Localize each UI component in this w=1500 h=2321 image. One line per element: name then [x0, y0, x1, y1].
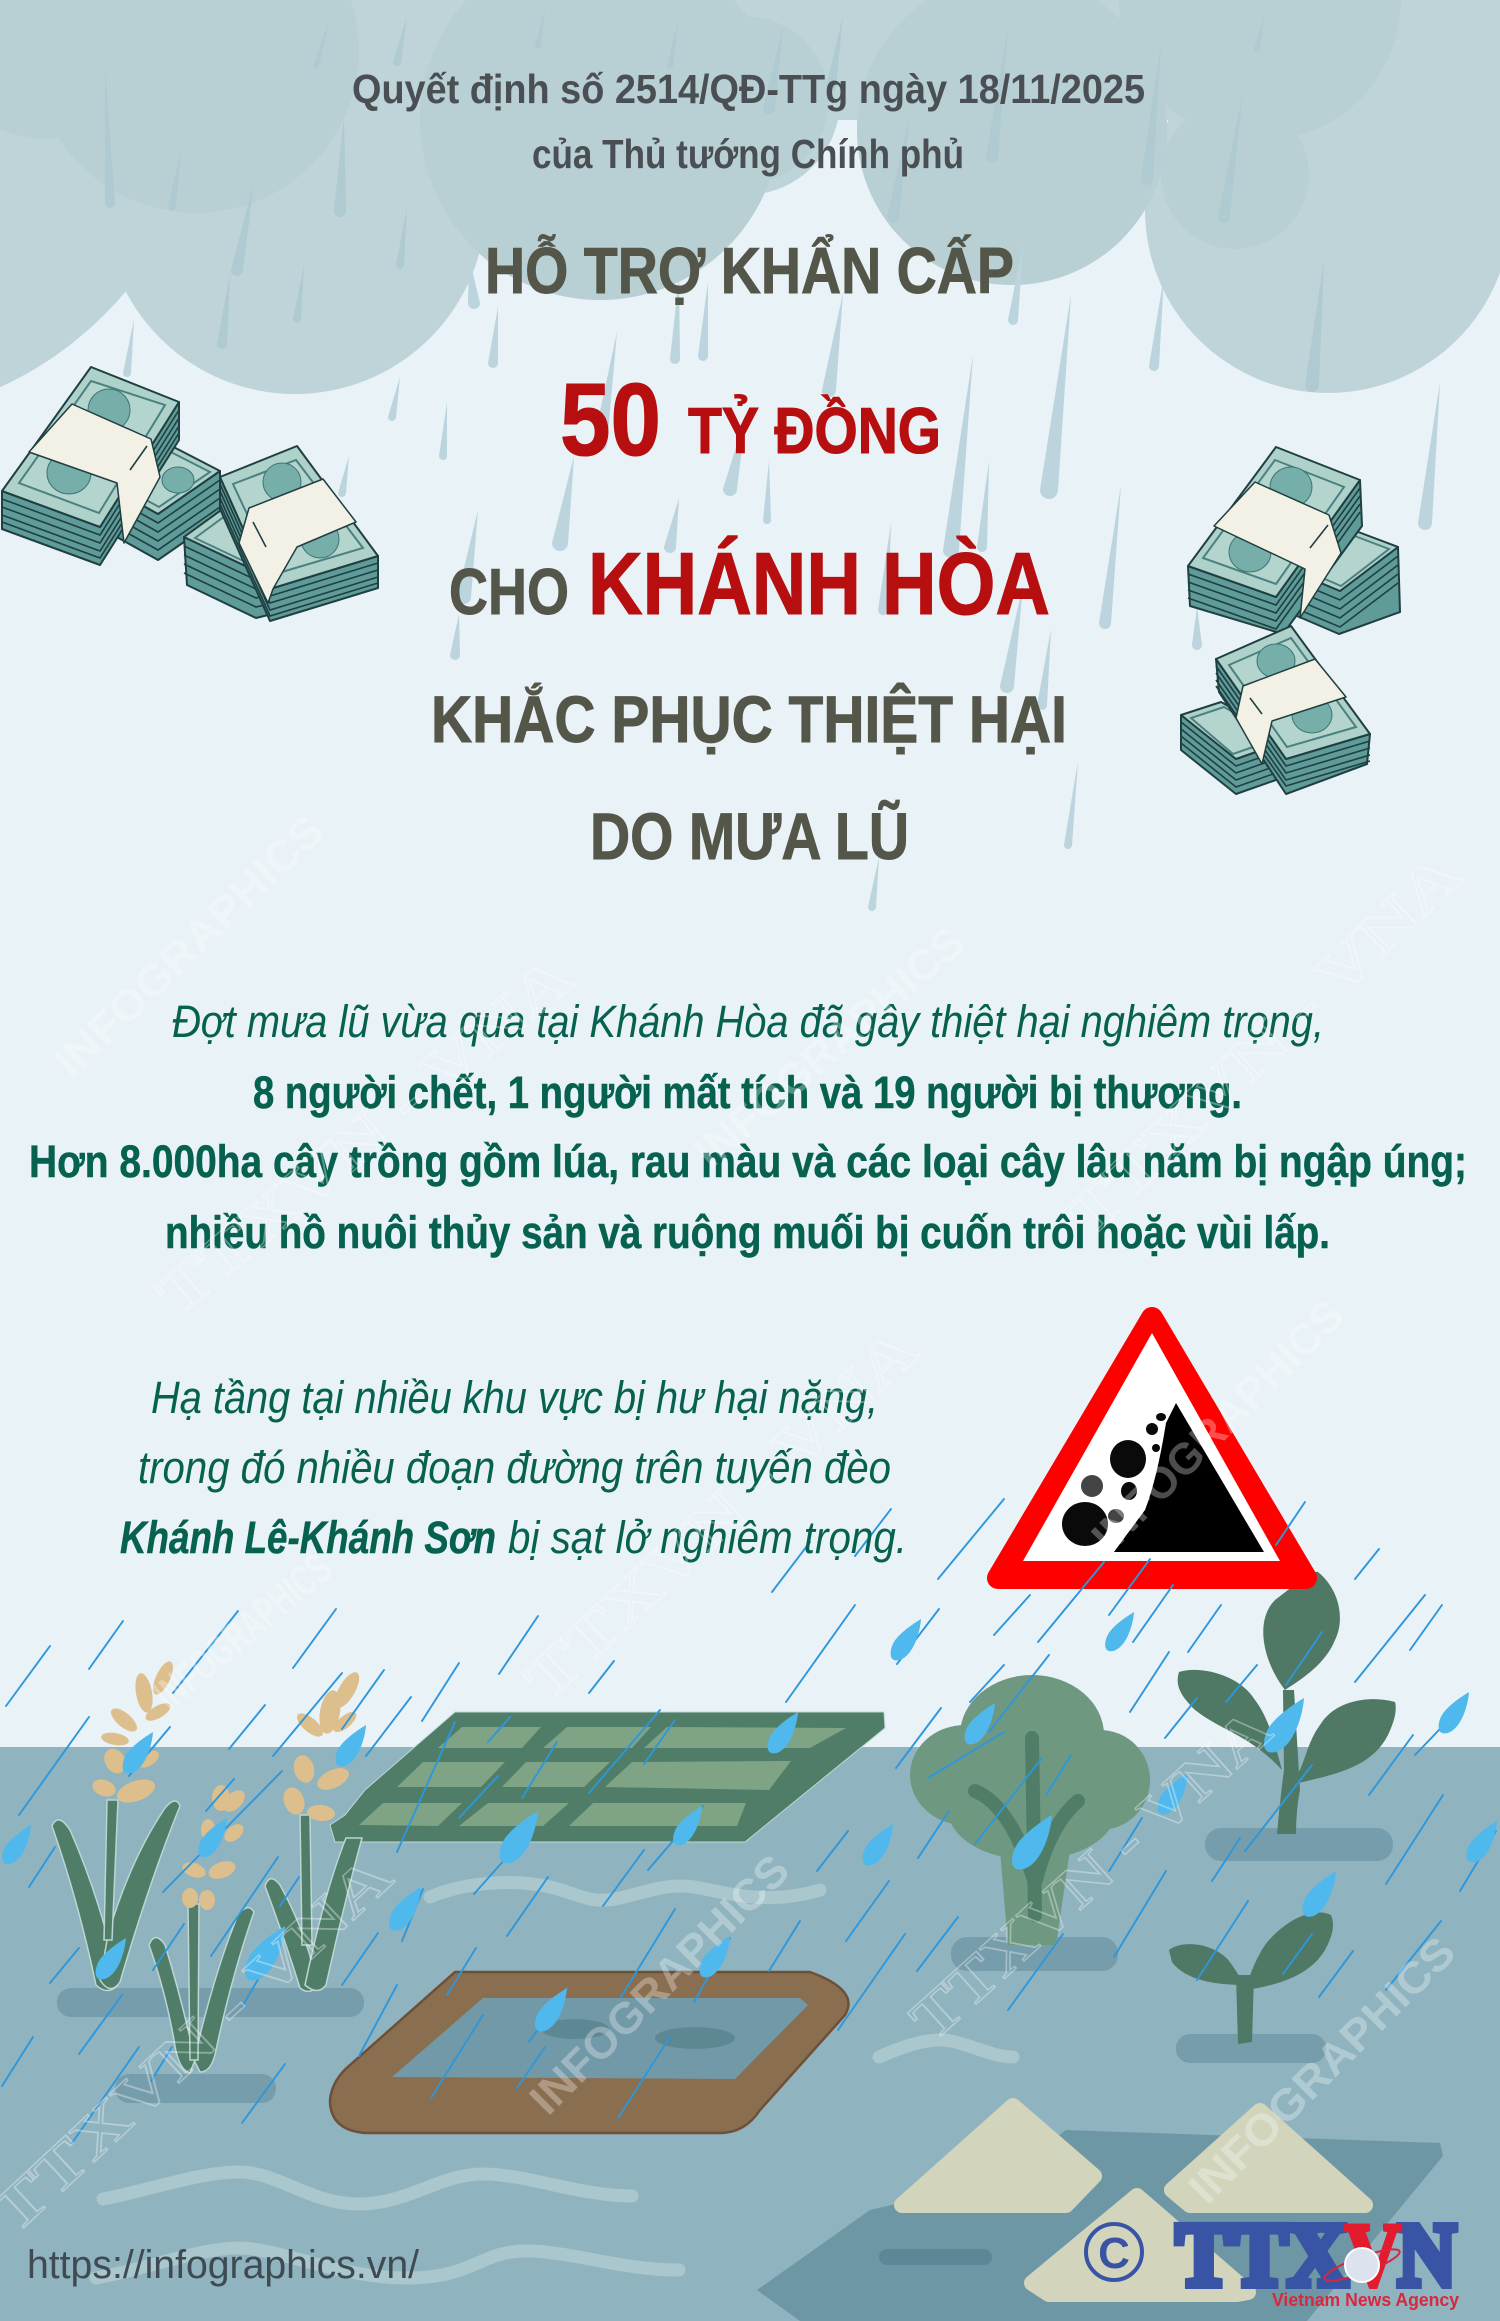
faint rain drops in the sky [105, 8, 1440, 911]
stack of banknotes F [1290, 530, 1400, 634]
flooded field grid [330, 1712, 885, 1842]
website url: https://infographics.vn/ [27, 2243, 420, 2287]
watermarks [0, 806, 1473, 2246]
money stacks: left group [2, 367, 378, 621]
main title: HỖ TRỢ KHẨN CẤP [485, 234, 1014, 307]
decision reference lines: Quyết định số 2514/QĐ-TTg ngày 18/11/2025 [352, 66, 1145, 112]
watermarks: INFOGRAPHICS [520, 1845, 799, 2124]
infrastructure paragraph: bị sạt lở nghiêm trọng. [508, 1512, 907, 1563]
watermarks: TTXVN - VNA [512, 1316, 930, 1713]
infrastructure paragraph: trong đó nhiều đoạn đường trên tuyến đèo [138, 1442, 891, 1493]
main title: TỶ ĐỒNG [688, 394, 941, 467]
watermarks: TTXVN - VNA [898, 1696, 1284, 2053]
main title: DO MƯA LŨ [590, 799, 909, 873]
decision reference lines: của Thủ tướng Chính phủ [532, 131, 964, 177]
watermarks: INFOGRAPHICS [685, 918, 974, 1178]
stack of banknotes C with paper band [220, 446, 378, 621]
watermarks: INFOGRAPHICS [145, 1544, 341, 1720]
stack of banknotes G with paper band [1216, 626, 1370, 794]
decision reference lines [352, 66, 1145, 177]
damage summary paragraph: nhiều hồ nuôi thủy sản và ruộng muối bị cuốn trôi hoặc vùi lấp. [165, 1207, 1330, 1258]
copyright mark: C [1098, 2229, 1130, 2278]
rice plant 1 [52, 1659, 180, 1990]
salt field shadow [757, 2130, 1443, 2321]
TTXVN logo: N [1398, 2206, 1456, 2305]
landslide warning sign [998, 1318, 1306, 1578]
slanted rain streaks [2, 1499, 1496, 2143]
watermarks: INFOGRAPHICS [1179, 1927, 1465, 2213]
small seedling [1169, 1912, 1333, 2044]
watermarks: TTXVN - VNA [1053, 841, 1473, 1249]
stack of banknotes H [1181, 702, 1290, 794]
TTXVN logo [1176, 2206, 1459, 2310]
main title: KHÁNH HÒA [588, 534, 1050, 633]
tall seedling [1178, 1572, 1396, 1834]
watermarks: INFOGRAPHICS [45, 806, 334, 1087]
big blue rain drops [2, 1612, 1497, 2032]
damage summary paragraph: Đợt mưa lũ vừa qua tại Khánh Hòa đã gây thiệt hại nghiêm trọng, [172, 996, 1324, 1047]
stack of banknotes A with paper band [2, 367, 179, 565]
watermarks: TTXVN - VNA [144, 943, 585, 1328]
TTXVN logo: Vietnam News Agency [1272, 2290, 1459, 2310]
flood water [0, 1747, 1500, 2321]
watermarks: INFOGRAPHICS [1082, 1291, 1354, 1562]
money stacks: right group [1181, 447, 1400, 794]
copyright mark [1086, 2224, 1142, 2280]
storm clouds [0, 0, 1500, 420]
main title [431, 234, 1067, 873]
main title: 50 [560, 362, 661, 477]
infrastructure paragraph: Khánh Lê-Khánh Sơn [120, 1512, 496, 1563]
main title: KHẮC PHỤC THIỆT HẠI [431, 682, 1067, 756]
shrimp pond [330, 1972, 848, 2133]
TTXVN logo: V [1345, 2206, 1401, 2305]
infrastructure paragraph: Hạ tầng tại nhiều khu vực bị hư hại nặng, [151, 1372, 878, 1423]
damage summary paragraph: 8 người chết, 1 người mất tích và 19 người bị thương. [253, 1067, 1242, 1118]
salt piles [902, 2106, 1365, 2294]
rice plant 3 [265, 1669, 364, 1991]
flooded bush [910, 1675, 1150, 1945]
rice plant 2 [149, 1785, 254, 2073]
stack of banknotes E with paper band [1188, 447, 1362, 634]
infrastructure paragraph [120, 1372, 907, 1563]
stack of banknotes B [115, 440, 220, 560]
main title: CHO [449, 555, 569, 628]
water ripples [96, 1883, 1013, 2278]
stack of banknotes D [184, 500, 300, 618]
plant shadows in water [57, 1828, 1393, 2103]
TTXVN logo: TTX [1176, 2206, 1348, 2305]
damage summary paragraph [29, 996, 1467, 1258]
